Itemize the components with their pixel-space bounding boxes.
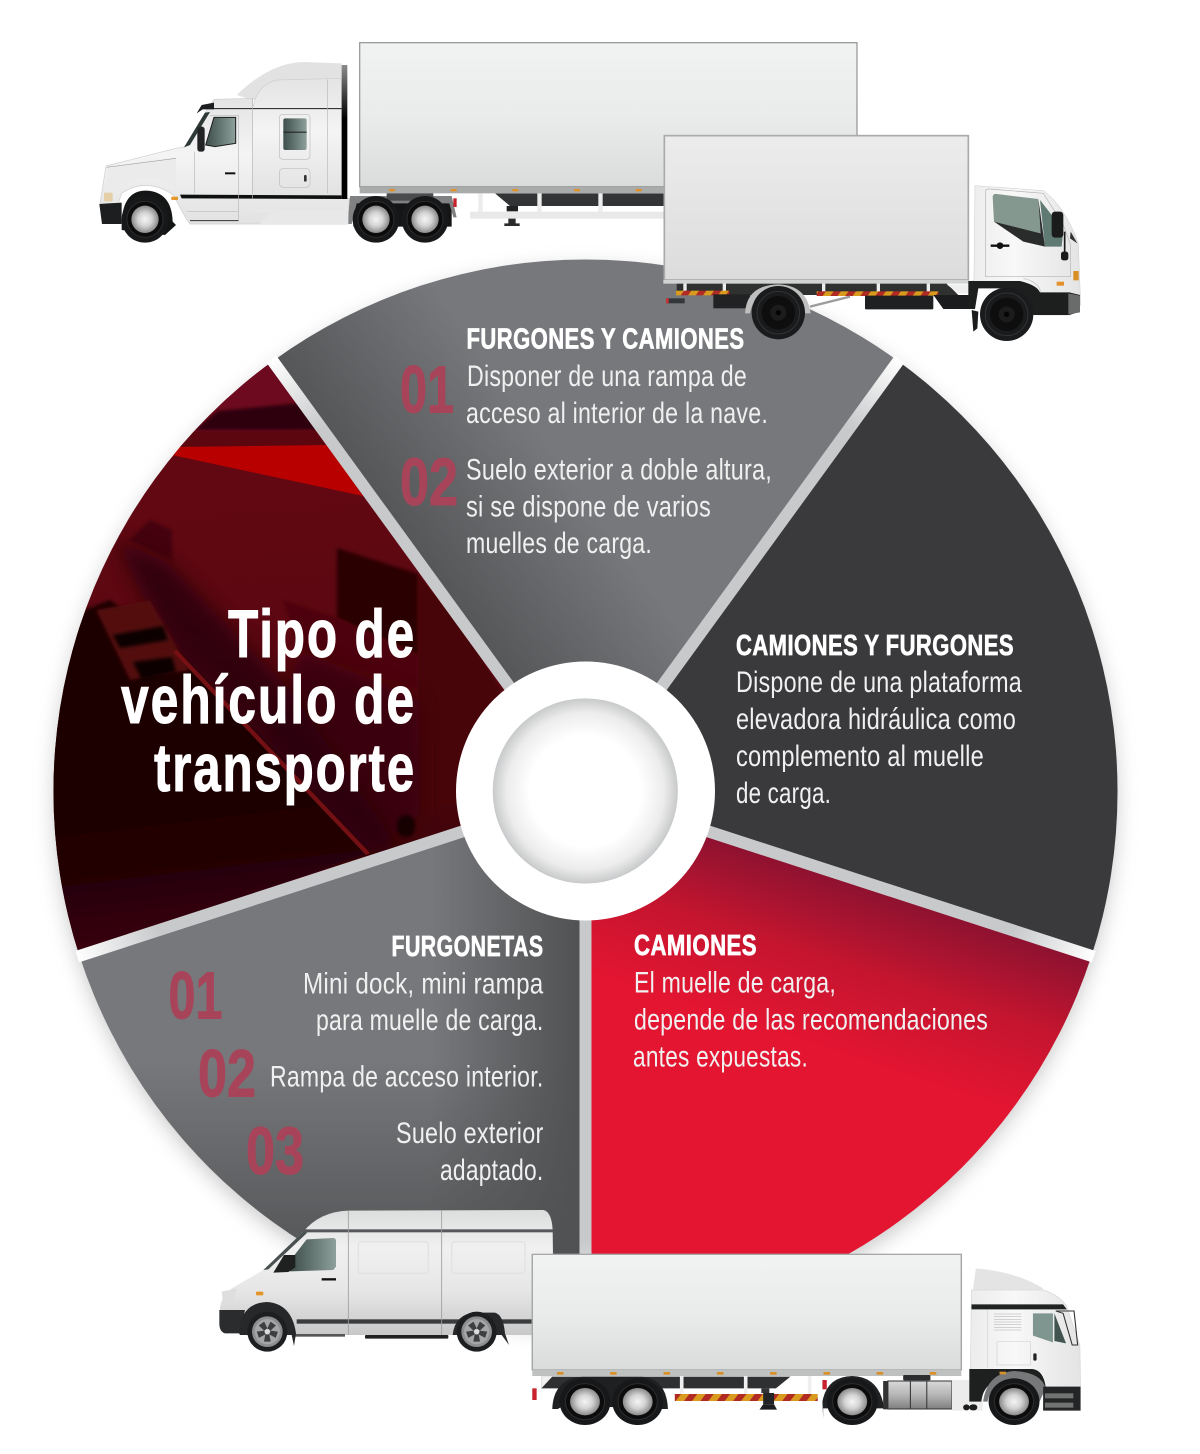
text: camiones y furgones: Dispone de una plataforma xyxy=(736,666,1022,699)
icon: semi truck bottom right xyxy=(532,1254,1081,1425)
pie shadow xyxy=(56,269,1116,1329)
text: furgones y camiones: muelles de carga. xyxy=(466,527,652,560)
text: furgones y camiones: si se dispone de varios xyxy=(466,490,711,524)
text: furgonetas: 02 xyxy=(198,1036,256,1112)
text: furgones y camiones: 01 xyxy=(400,352,454,428)
text: furgonetas: Rampa de acceso interior. xyxy=(270,1060,544,1094)
text: furgones y camiones: 02 xyxy=(400,445,458,520)
wedge separators xyxy=(75,356,1096,1326)
text: title: Tipo de xyxy=(228,596,416,672)
text: furgonetas: Mini dock, mini rampa xyxy=(303,968,544,1000)
text: camiones y furgones xyxy=(736,630,1022,810)
text: furgonetas: Suelo exterior xyxy=(396,1117,544,1150)
text: furgones y camiones xyxy=(400,324,772,560)
text: furgonetas: FURGONETAS xyxy=(392,931,544,963)
panel: camiones y furgones wedge xyxy=(586,361,1118,956)
text: furgonetas: para muelle de carga. xyxy=(316,1004,544,1037)
text: camiones: antes expuestas. xyxy=(633,1040,808,1074)
text: furgones y camiones: acceso al interior de la nave. xyxy=(466,397,768,430)
text: title xyxy=(121,596,416,806)
central hub xyxy=(456,662,715,920)
panel: furgonetas wedge xyxy=(80,792,586,1324)
text: furgones y camiones: FURGONES Y CAMIONES xyxy=(466,324,744,356)
text: furgonetas: adaptado. xyxy=(440,1154,544,1187)
text: furgonetas: 03 xyxy=(246,1114,304,1189)
icon: delivery van bottom left xyxy=(219,1210,554,1352)
text: camiones xyxy=(633,930,988,1074)
text: furgones y camiones: Suelo exterior a doble altura, xyxy=(466,454,772,486)
text: furgonetas xyxy=(168,931,544,1189)
text: camiones: depende de las recomendaciones xyxy=(634,1004,988,1036)
panel: furgones y camiones wedge xyxy=(273,259,898,792)
icon: semi truck top left xyxy=(99,43,857,243)
text: camiones: CAMIONES xyxy=(634,930,757,962)
text: furgonetas: 01 xyxy=(168,958,222,1034)
panel: camiones wedge xyxy=(586,792,1092,1324)
panel: title photo wedge xyxy=(53,364,504,950)
text: camiones y furgones: CAMIONES Y FURGONES xyxy=(736,630,1014,662)
text: title: vehículo de xyxy=(121,662,416,738)
text: title: transporte xyxy=(154,730,416,806)
icon: box truck top right xyxy=(663,136,1081,341)
text: camiones y furgones: de carga. xyxy=(736,777,831,810)
text: camiones y furgones: complemento al muelle xyxy=(736,740,984,773)
text: camiones y furgones: elevadora hidráulica como xyxy=(736,703,1016,736)
text: furgones y camiones: Disponer de una rampa de xyxy=(467,360,747,393)
text: camiones: El muelle de carga, xyxy=(634,966,836,1000)
